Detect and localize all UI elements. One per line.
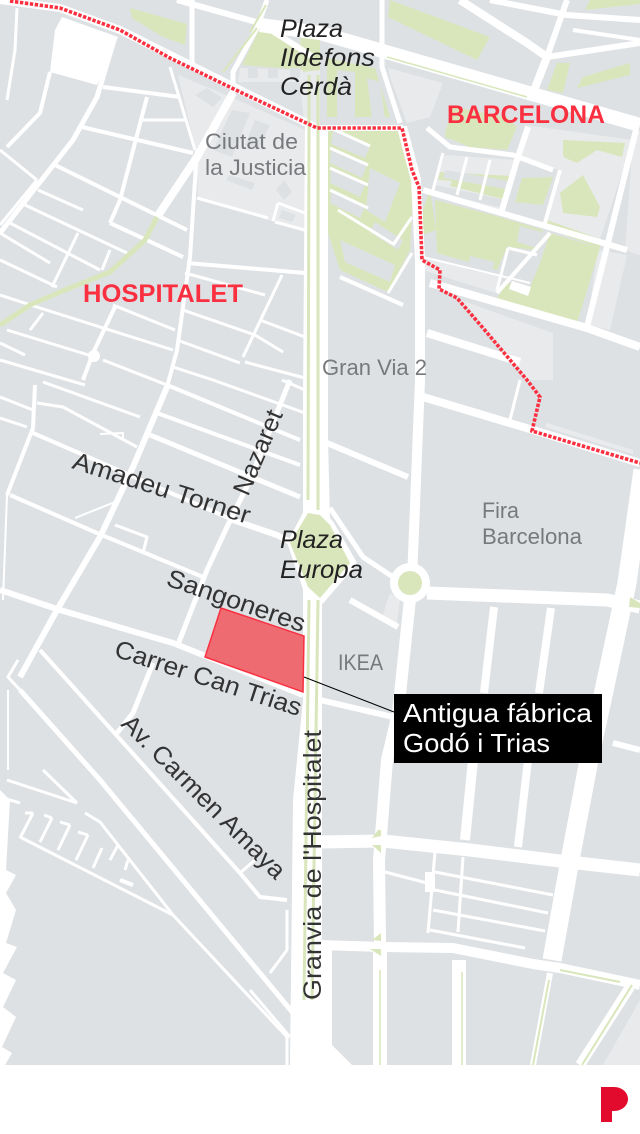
street label: Amadeu Torner: Amadeu Torner <box>69 447 254 530</box>
Amadeu Torner, main diagonal and Carrer Can Trias <box>0 150 393 1065</box>
logo: P <box>601 1087 628 1122</box>
label: Fira Barcelona: Barcelona <box>482 524 583 549</box>
callout: Antigua fábrica Godó i Trias <box>394 694 602 763</box>
label: IKEA: IKEA <box>338 650 383 675</box>
sawtooth west edge <box>0 790 17 1065</box>
street label: Nazaret: Nazaret <box>228 406 289 499</box>
leader line <box>304 677 394 712</box>
green areas: parks <box>130 0 640 323</box>
street label: Carrer Can Trias: Carrer Can Trias <box>111 635 305 722</box>
white margin around Plaza Europa <box>292 512 352 600</box>
label: Fira Barcelona: Fira <box>482 498 520 523</box>
label: Plaza Europa <box>280 526 363 584</box>
label: Fira Barcelona <box>482 498 583 549</box>
label: Plaza Europa: Plaza <box>280 526 343 554</box>
callout: Antigua fábrica Godó i Trias: Godó i Trias <box>403 728 550 758</box>
top-left and north streets <box>0 0 317 600</box>
label: Barcelona: BARCELONA <box>447 101 605 129</box>
label: Ciutat de la Justicia: Ciutat de <box>205 129 298 154</box>
Gran Via corridor <box>290 128 332 1065</box>
light-gray institutional areas <box>178 68 640 1065</box>
label: Ciutat de la Justicia: la Justicia <box>205 155 307 180</box>
buildings inside green areas <box>195 68 565 282</box>
municipal boundary <box>10 1 640 463</box>
factory plot <box>205 608 304 692</box>
label: Plaza Europa: Europa <box>280 556 363 584</box>
label: Plaza Ildefons Cerdà <box>280 15 375 101</box>
south-east streets <box>320 443 640 1065</box>
label: Ciutat de la Justicia <box>205 129 307 180</box>
label: Hospitalet: HOSPITALET <box>83 280 243 308</box>
roundabout <box>390 563 430 603</box>
label: Plaza Ildefons Cerdà: Plaza <box>280 15 343 43</box>
label: Plaza Ildefons Cerdà: Cerdà <box>280 73 352 101</box>
street label: Av. Carmen Amaya: Av. Carmen Amaya <box>116 709 291 885</box>
east and top streets <box>177 0 640 1065</box>
street label: Granvia de l'Hospitalet: Granvia de l'Hospitalet <box>299 730 327 1000</box>
green: Plaza Europa <box>290 513 350 598</box>
label: Gran Via 2: Gran Via 2 <box>322 355 427 380</box>
label: Plaza Ildefons Cerdà: Ildefons <box>280 44 375 72</box>
callout: Antigua fábrica Godó i Trias: Antigua fábrica <box>403 698 593 728</box>
street label: Sangoneres: Sangoneres <box>163 564 309 638</box>
